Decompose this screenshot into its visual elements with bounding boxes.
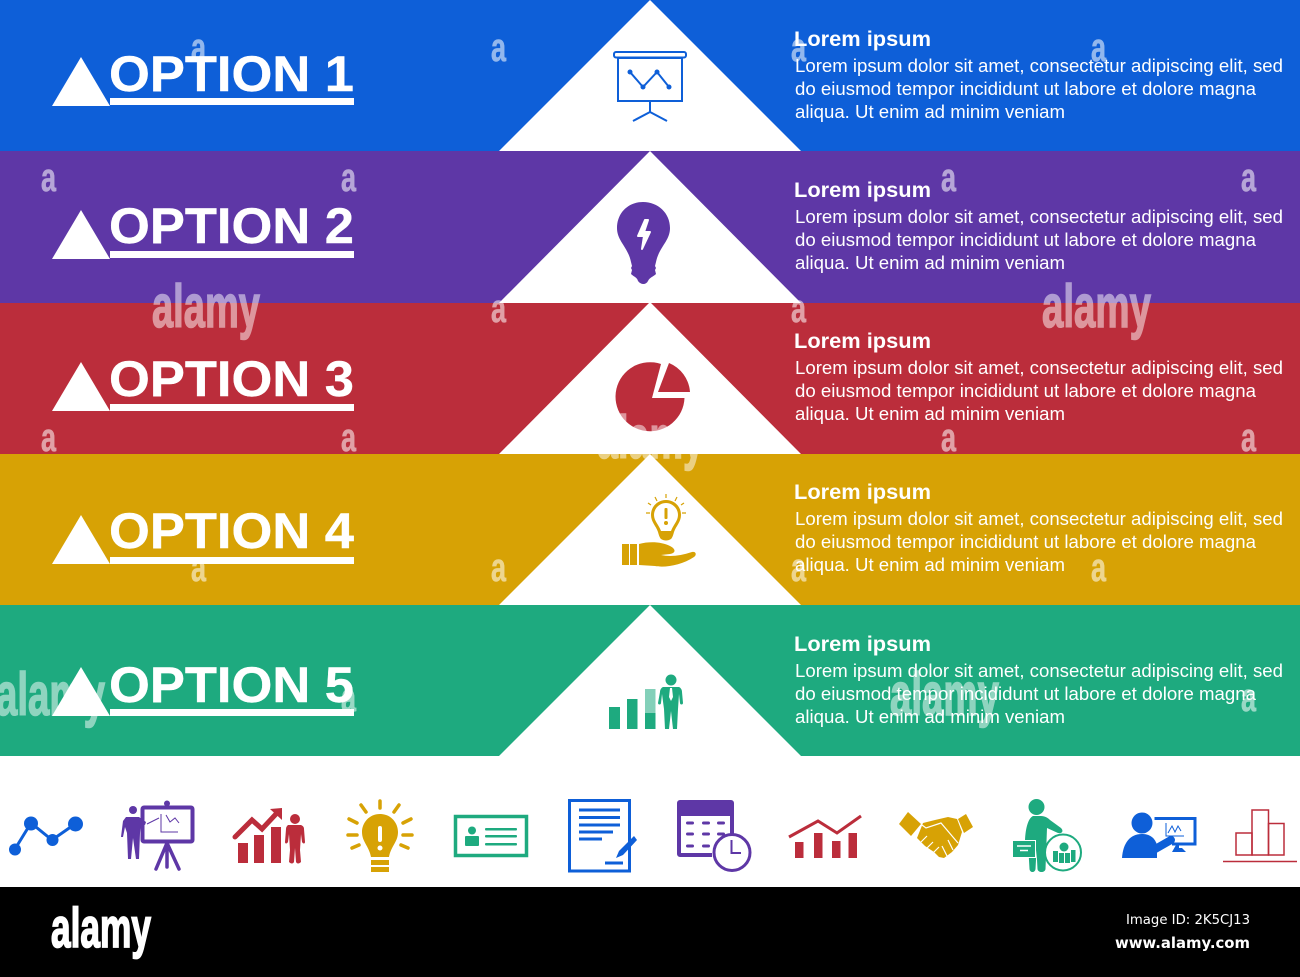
heading: option 2: OPTION 2 bbox=[109, 198, 354, 254]
text block: option 5: do eiusmod tempor incididunt ut labore et dolore magna bbox=[795, 684, 1257, 704]
text block: option 5 bbox=[794, 632, 1283, 727]
footer icon: idea bulb with exclamation bbox=[348, 801, 412, 872]
text block: option 2: Lorem ipsum bbox=[794, 178, 931, 202]
watermarks: small letters: a bbox=[791, 26, 807, 70]
watermarks: small letters: a bbox=[941, 416, 957, 460]
footer icon: presenter with board bbox=[121, 800, 192, 869]
text block: option 3: Lorem ipsum bbox=[794, 329, 931, 353]
text block: option 2: aliqua. Ut enim ad minim veniam bbox=[795, 253, 1065, 273]
icon: bulb on open hand bbox=[622, 494, 696, 567]
footer icon: line graph bbox=[9, 816, 83, 856]
watermarks: small letters: a bbox=[791, 546, 807, 590]
footer icon: id card bbox=[456, 816, 526, 856]
watermarks: large wordmarks: alamy bbox=[0, 661, 105, 728]
text block: option 1 bbox=[794, 27, 1283, 122]
watermarks: small letters: a bbox=[191, 26, 207, 70]
footer icon: signed document bbox=[570, 800, 637, 871]
icon: small triangle 3 bbox=[52, 362, 110, 411]
watermarks: small letters: a bbox=[1241, 156, 1257, 200]
option 4 heading group bbox=[52, 503, 354, 564]
panel: option 1 band bbox=[0, 0, 1300, 151]
watermarks: small letters: a bbox=[1241, 676, 1257, 720]
option 1 heading group bbox=[52, 46, 354, 106]
watermark over pie chart and band 4: alamy bbox=[597, 404, 704, 471]
footer icon: line and bar chart bbox=[789, 816, 861, 858]
website: www.alamy.com bbox=[1115, 934, 1250, 952]
icon: small triangle 2 bbox=[52, 210, 110, 259]
text block: option 5: Lorem ipsum bbox=[794, 632, 931, 656]
icon: bar chart with businessman bbox=[609, 674, 683, 729]
watermarks: large wordmarks bbox=[0, 273, 1151, 728]
option 3 heading group bbox=[52, 351, 354, 411]
icon: presentation board bbox=[614, 52, 686, 121]
watermarks: large wordmarks: alamy bbox=[1042, 273, 1151, 340]
watermarks: small letters bbox=[41, 26, 1257, 720]
watermarks: small letters: a bbox=[341, 676, 357, 720]
heading: option 4: OPTION 4 bbox=[109, 503, 354, 559]
watermarks: small letters: a bbox=[491, 26, 507, 70]
underline 4 bbox=[110, 557, 354, 564]
watermarks: small letters: a bbox=[41, 416, 57, 460]
text block: option 4: do eiusmod tempor incididunt ut labore et dolore magna bbox=[795, 532, 1257, 552]
text block: option 1: aliqua. Ut enim ad minim veniam bbox=[795, 102, 1065, 122]
heading: option 3: OPTION 3 bbox=[109, 351, 354, 407]
watermarks: small letters: a bbox=[41, 156, 57, 200]
white central triangles bbox=[499, 0, 801, 756]
footer icon: rising bars with businessman bbox=[235, 808, 305, 864]
underline 2 bbox=[110, 251, 354, 258]
watermarks: small letters: a bbox=[191, 546, 207, 590]
text block: option 1: Lorem ipsum dolor sit amet, consectetur adipiscing elit, sed bbox=[795, 56, 1283, 76]
text block: option 3: Lorem ipsum dolor sit amet, consectetur adipiscing elit, sed bbox=[795, 358, 1283, 378]
text block: option 2: Lorem ipsum dolor sit amet, consectetur adipiscing elit, sed bbox=[795, 207, 1283, 227]
icon: small triangle 4 bbox=[52, 515, 110, 564]
watermarks: large wordmarks: alamy bbox=[152, 273, 260, 340]
footer icon: analyst at monitor bbox=[1122, 812, 1195, 858]
text block: option 4: Lorem ipsum dolor sit amet, consectetur adipiscing elit, sed bbox=[795, 509, 1283, 529]
watermarks: small letters: a bbox=[341, 156, 357, 200]
watermarks: small letters: a bbox=[341, 416, 357, 460]
text block: option 4: Lorem ipsum bbox=[794, 480, 931, 504]
underline 1 bbox=[110, 98, 354, 105]
heading: option 5: OPTION 5 bbox=[109, 657, 354, 713]
underline 3 bbox=[110, 404, 354, 411]
footer icon: calendar and clock bbox=[677, 800, 750, 870]
heading: option 1: OPTION 1 bbox=[109, 46, 354, 102]
footer bar bbox=[0, 887, 1300, 977]
watermarks: small letters: a bbox=[791, 287, 807, 331]
watermarks: small letters: a bbox=[1241, 416, 1257, 460]
text block: option 3 bbox=[794, 329, 1283, 424]
footer logo: alamy bbox=[51, 896, 151, 959]
text block: option 3: do eiusmod tempor incididunt ut labore et dolore magna bbox=[795, 381, 1257, 401]
option 5 heading group bbox=[52, 657, 354, 716]
text block: option 2: do eiusmod tempor incididunt ut labore et dolore magna bbox=[795, 230, 1257, 250]
text block: option 4 bbox=[794, 480, 1283, 575]
footer icon: handshake bbox=[899, 812, 973, 858]
icon: light bulb with bolt bbox=[617, 202, 670, 284]
icon: small triangle 1 bbox=[52, 57, 110, 106]
text block: option 4: aliqua. Ut enim ad minim veniam bbox=[795, 555, 1065, 575]
option 2 heading group bbox=[52, 198, 354, 259]
panel: option 4 band bbox=[0, 454, 1300, 605]
watermarks: large wordmarks: alamy bbox=[890, 661, 999, 728]
panel: option 3 band bbox=[0, 303, 1300, 454]
panel: option 2 band bbox=[0, 151, 1300, 303]
footer icon: businessman with briefcase and money bbox=[1012, 799, 1081, 872]
watermarks: small letters: a bbox=[491, 546, 507, 590]
text block: option 5: Lorem ipsum dolor sit amet, consectetur adipiscing elit, sed bbox=[795, 661, 1283, 681]
icon: small triangle 5 bbox=[52, 667, 110, 716]
text block: option 3: aliqua. Ut enim ad minim veniam bbox=[795, 404, 1065, 424]
image id: Image ID: 2K5CJ13 bbox=[1126, 912, 1250, 928]
watermarks: small letters: a bbox=[941, 156, 957, 200]
watermarks: small letters: a bbox=[1091, 26, 1107, 70]
text block: option 1: Lorem ipsum bbox=[794, 27, 931, 51]
icon: pie chart bbox=[616, 362, 690, 431]
text block: option 2 bbox=[794, 178, 1283, 273]
watermarks: small letters: a bbox=[491, 287, 507, 331]
panel: option 5 band bbox=[0, 605, 1300, 756]
footer icon: outlined bar chart bbox=[1223, 810, 1297, 862]
underline 5 bbox=[110, 709, 354, 716]
text block: option 1: do eiusmod tempor incididunt ut labore et dolore magna bbox=[795, 79, 1257, 99]
watermarks: small letters: a bbox=[1091, 546, 1107, 590]
text block: option 5: aliqua. Ut enim ad minim veniam bbox=[795, 707, 1065, 727]
